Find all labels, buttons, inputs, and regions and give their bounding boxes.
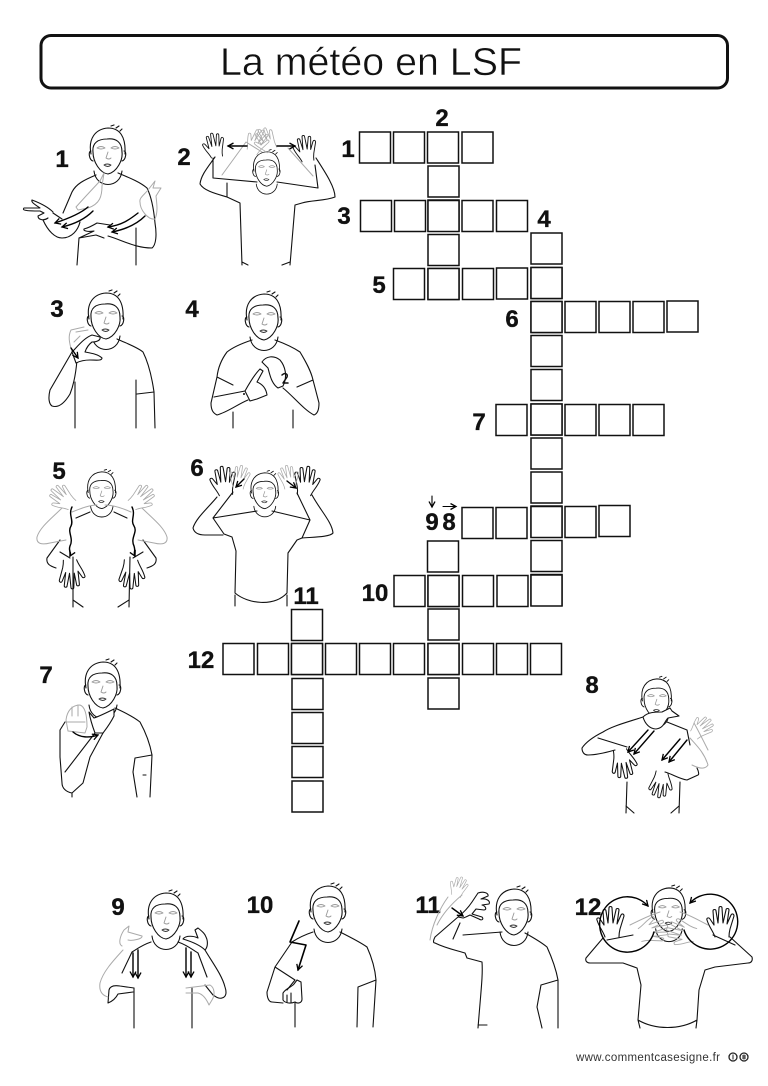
number 9: 9 bbox=[111, 894, 125, 921]
lower left hand bbox=[108, 986, 134, 1003]
number 2: 2 bbox=[177, 144, 191, 171]
sign 12 bbox=[575, 885, 752, 1028]
torso and arm bbox=[60, 708, 152, 797]
signing fist bbox=[283, 980, 302, 1003]
ghost hands bbox=[76, 173, 161, 219]
ghost hand bbox=[66, 705, 87, 733]
right hand bbox=[292, 134, 318, 163]
motion arrows bbox=[228, 145, 295, 147]
motion squiggles bbox=[69, 507, 135, 556]
motion arrow bbox=[452, 908, 463, 916]
ghost arm and hand bbox=[690, 723, 708, 768]
word 6 across bbox=[531, 301, 698, 332]
crossword clue numbers: 6 bbox=[505, 306, 519, 333]
sign 10 bbox=[247, 883, 376, 1027]
crossword clue numbers: 2 bbox=[435, 105, 449, 132]
upper right hand bbox=[183, 928, 207, 950]
head bbox=[309, 883, 346, 942]
lowered hands bbox=[59, 559, 85, 589]
head bbox=[87, 290, 124, 350]
head bbox=[253, 150, 280, 194]
torso and arm bbox=[434, 917, 558, 1028]
signing hand at neck bbox=[89, 709, 114, 733]
crossword grid bbox=[223, 132, 698, 812]
title banner bbox=[41, 36, 728, 88]
torso and arms bbox=[49, 339, 155, 428]
torso and arms bbox=[43, 173, 156, 265]
lightning motion arrow bbox=[290, 921, 306, 970]
crossword clue numbers bbox=[188, 105, 551, 674]
ghost hand bbox=[69, 327, 88, 352]
torso and arms bbox=[193, 492, 333, 606]
word 2 down bbox=[428, 166, 459, 300]
motion arrows bbox=[628, 730, 687, 762]
direction arrows for clues 9 and 8 bbox=[432, 496, 456, 507]
torso and arms bbox=[586, 935, 752, 1028]
head bbox=[495, 886, 532, 946]
torso and arms bbox=[122, 942, 226, 1028]
torso and arms bbox=[582, 717, 699, 813]
head bbox=[651, 885, 686, 942]
head bbox=[89, 125, 126, 184]
number 10: 10 bbox=[247, 892, 273, 919]
crossword clue numbers: 5 bbox=[372, 272, 386, 299]
ghost hands crossing over face bbox=[630, 912, 708, 949]
word 4 down bbox=[531, 233, 562, 606]
motion arrow bbox=[73, 732, 98, 737]
website credit: www.commentcasesigne.fr bbox=[575, 1052, 720, 1064]
word 5 across bbox=[394, 268, 562, 300]
torso and arm bbox=[267, 932, 376, 1027]
ghost arms and hands bbox=[222, 142, 313, 176]
signing hand bbox=[458, 892, 489, 920]
crossword clue numbers: 7 bbox=[472, 409, 486, 436]
sign 5 bbox=[37, 458, 167, 607]
ghost arm and hands bbox=[100, 926, 214, 1005]
ghost hands bbox=[227, 463, 252, 490]
number 11: 11 bbox=[415, 892, 441, 919]
small motion dot bbox=[243, 393, 245, 395]
sign 3 bbox=[49, 290, 155, 428]
word 10 across bbox=[394, 575, 562, 606]
ghost arm and hand bbox=[430, 895, 462, 940]
motion arrows bbox=[55, 207, 145, 232]
number 6: 6 bbox=[190, 455, 204, 482]
license icons bbox=[729, 1053, 748, 1061]
left hand bbox=[201, 131, 226, 159]
motion arrows bbox=[133, 948, 191, 978]
circular motion arrows bbox=[600, 894, 738, 952]
torso bbox=[73, 512, 130, 607]
lowered hands bbox=[609, 747, 639, 781]
sign 9 bbox=[100, 890, 226, 1028]
word 9 down bbox=[428, 541, 459, 709]
sign 6 bbox=[190, 455, 333, 606]
signing hand at mouth bbox=[72, 335, 102, 363]
raised hands bbox=[209, 465, 237, 497]
sign 7 bbox=[39, 659, 152, 797]
crossword clue numbers: 11 bbox=[293, 583, 319, 610]
title: La météo en LSF bbox=[220, 41, 522, 84]
motion arrows bbox=[236, 479, 296, 488]
number 8: 8 bbox=[585, 672, 599, 699]
number 1: 1 bbox=[55, 146, 69, 173]
crossword clue numbers: 4 bbox=[537, 206, 551, 233]
number 12: 12 bbox=[575, 894, 601, 921]
motion arrow bbox=[71, 348, 78, 358]
head bbox=[147, 890, 184, 950]
word 7 across bbox=[496, 404, 664, 436]
lowered arms bbox=[47, 540, 156, 568]
head bbox=[87, 469, 116, 517]
crossword clue numbers: 1 bbox=[341, 136, 355, 163]
left hand (signing) bbox=[23, 200, 53, 220]
head bbox=[84, 659, 121, 718]
torso and arms bbox=[200, 157, 335, 265]
word 12 across bbox=[223, 644, 562, 674]
word 1 across bbox=[360, 132, 493, 163]
crossword clue numbers: 8 bbox=[442, 509, 456, 536]
crossword clue numbers: 9 bbox=[425, 509, 439, 536]
number 7: 7 bbox=[39, 662, 53, 689]
number 4: 4 bbox=[185, 296, 199, 323]
sign 11 bbox=[415, 874, 558, 1028]
sign 8 bbox=[582, 672, 717, 813]
right hand (signing) bbox=[79, 223, 110, 238]
crossword clue numbers: 10 bbox=[362, 580, 388, 607]
word 8 across bbox=[462, 506, 630, 538]
crossword clue numbers: 3 bbox=[337, 203, 351, 230]
signing hands bbox=[245, 357, 286, 401]
open hands bbox=[597, 906, 624, 937]
sign 4 bbox=[185, 291, 319, 428]
word 11 down bbox=[292, 610, 323, 812]
sign 2 bbox=[177, 124, 335, 265]
ghost arms bbox=[37, 505, 167, 544]
torso and arms bbox=[211, 340, 319, 428]
crossword clue numbers: 12 bbox=[188, 647, 214, 674]
number 3: 3 bbox=[50, 296, 64, 323]
head bbox=[250, 470, 279, 517]
head bbox=[641, 676, 672, 727]
hand at mouth bbox=[643, 708, 679, 729]
number 5: 5 bbox=[52, 458, 66, 485]
word 3 across bbox=[360, 200, 528, 232]
sign 1 bbox=[23, 125, 161, 265]
head bbox=[245, 291, 282, 350]
small mark 2 bbox=[282, 374, 288, 383]
ghost hands bbox=[44, 481, 79, 515]
